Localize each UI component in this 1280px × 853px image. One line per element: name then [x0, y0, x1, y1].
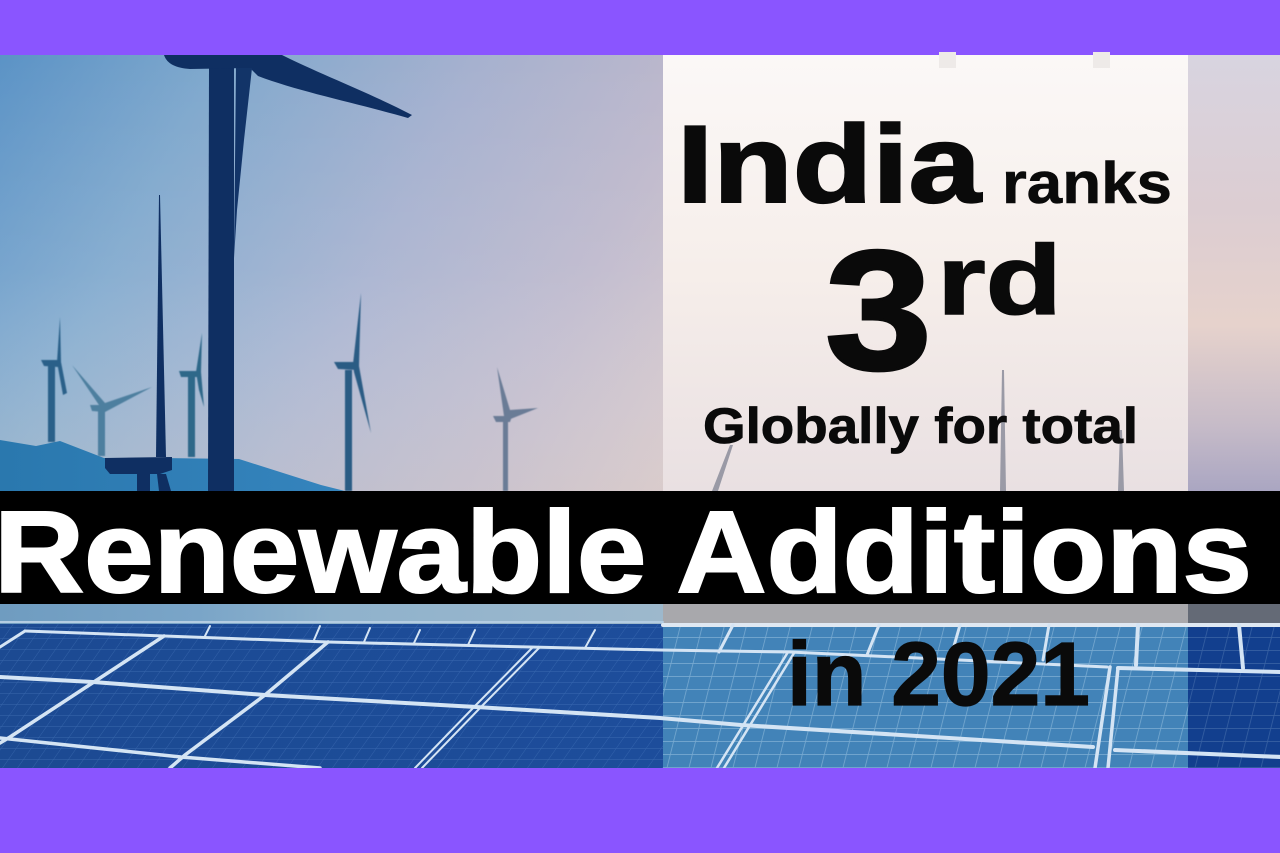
photo panel: sky background	[0, 55, 1280, 491]
solar panel frame lines	[0, 622, 1280, 768]
heading: 3rd	[825, 216, 1062, 406]
faint turbines behind text panel	[712, 370, 1124, 491]
heading: India ranks: India	[677, 103, 982, 226]
top purple band	[0, 0, 1280, 55]
translucent white text panel	[663, 52, 1188, 491]
heading: India ranks: ranks	[1002, 151, 1172, 216]
bottom purple band	[0, 768, 1280, 853]
heading: 3rd: 3	[825, 216, 932, 406]
icon: small wind turbines	[41, 293, 538, 491]
text: Globally for total: Globally for total	[703, 398, 1138, 454]
icon: mid wind turbine	[105, 195, 172, 491]
icon: large foreground wind turbine	[164, 55, 412, 491]
heading: India ranks	[677, 103, 1172, 226]
photo panel: solar array	[0, 604, 1280, 768]
banner: Renewable Additions: Renewable Additions	[0, 487, 1252, 617]
text: in 2021: in 2021	[787, 625, 1090, 725]
distant hills	[0, 440, 345, 491]
heading: 3rd: rd	[937, 225, 1062, 335]
